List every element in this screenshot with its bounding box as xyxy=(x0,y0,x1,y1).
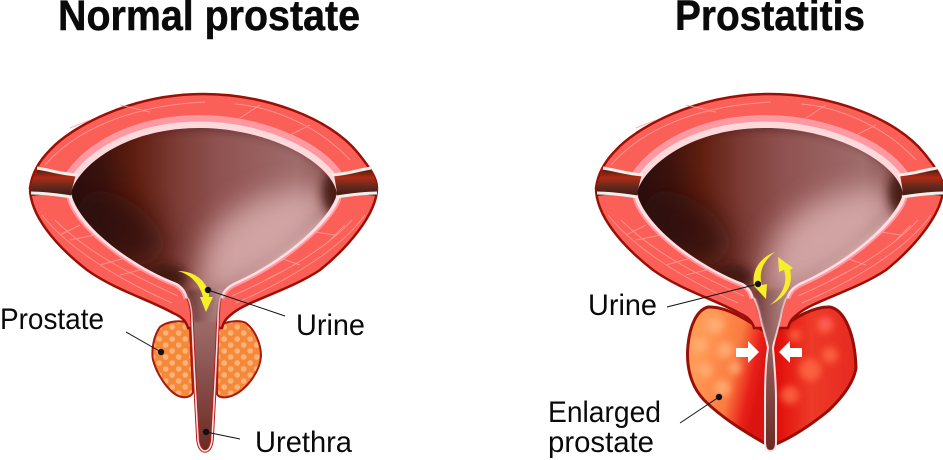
label: urine: Urine xyxy=(296,309,365,342)
label: prostate: Prostate xyxy=(0,303,104,336)
icon: yellow circular arrows xyxy=(753,252,793,305)
icon: bladder xyxy=(30,94,378,328)
pointer: urine xyxy=(205,287,285,316)
pointer: enlarged prostate xyxy=(680,394,722,423)
label: enlarged prostate second line: prostate xyxy=(548,426,654,459)
panel: prostatitis diagram xyxy=(548,94,943,459)
label: urethra: Urethra xyxy=(255,426,352,459)
pointer: urethra xyxy=(203,429,240,439)
icon: bladder xyxy=(596,94,943,328)
pointer: urine xyxy=(667,281,761,307)
label: urine: Urine xyxy=(588,289,657,322)
label: enlarged prostate: Enlarged xyxy=(548,396,661,429)
icon: enlarged prostate xyxy=(688,307,856,444)
icon: white arrow left xyxy=(736,341,759,363)
pointer: prostate xyxy=(126,332,164,355)
panel: normal prostate diagram xyxy=(0,94,378,459)
icon: white arrow right xyxy=(779,341,802,363)
icon: urethra xyxy=(187,290,222,451)
icon: yellow flow arrow xyxy=(178,271,213,312)
icon: prostate lobes xyxy=(152,321,261,397)
icon: compressed urethra xyxy=(753,290,788,451)
